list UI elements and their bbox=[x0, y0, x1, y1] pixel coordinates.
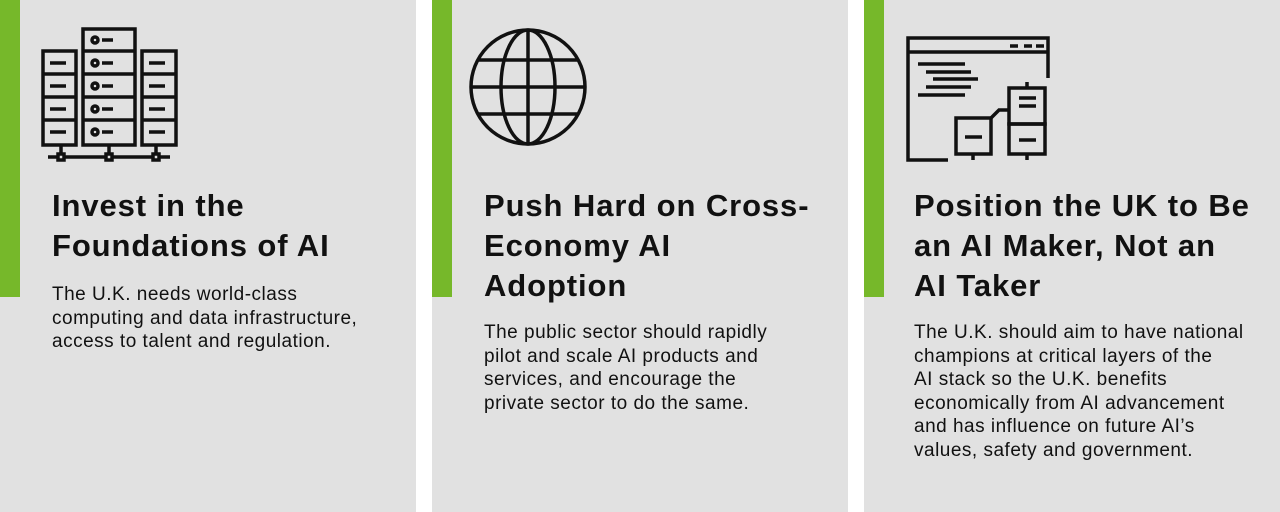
body text: The public sector should rapidly pilot and scale AI products and services, and encourage the private sector to do the same. bbox=[484, 322, 767, 414]
body text bbox=[914, 322, 1244, 460]
icon: window with flowchart bbox=[906, 36, 1050, 162]
heading bbox=[914, 188, 1250, 303]
heading: Adoption bbox=[484, 268, 627, 303]
body text: The U.K. should aim to have national bbox=[914, 322, 1244, 343]
body text: economically from AI advancement bbox=[914, 392, 1225, 414]
heading: Push Hard on Cross- bbox=[484, 188, 809, 223]
panel: foundations bbox=[0, 0, 416, 512]
heading bbox=[484, 188, 809, 303]
accent bar bbox=[432, 0, 452, 297]
heading: an AI Maker, Not an bbox=[914, 228, 1216, 263]
heading: Economy AI bbox=[484, 228, 671, 263]
panel: AI maker bbox=[864, 0, 1280, 512]
body text: AI stack so the U.K. benefits bbox=[914, 369, 1167, 390]
panel: adoption bbox=[432, 0, 848, 512]
icon: globe bbox=[469, 28, 587, 146]
body text: champions at critical layers of the bbox=[914, 346, 1212, 366]
body text: and has influence on future AI’s bbox=[914, 416, 1195, 437]
icon: servers bbox=[41, 27, 178, 162]
accent bar bbox=[864, 0, 884, 297]
body text: values, safety and government. bbox=[914, 440, 1193, 460]
heading bbox=[52, 188, 330, 263]
heading: Position the UK to Be bbox=[914, 188, 1250, 223]
heading: AI Taker bbox=[914, 268, 1041, 303]
body text: The U.K. needs world-class computing and data infrastructure, access to talent and regulation. bbox=[52, 284, 357, 352]
accent bar bbox=[0, 0, 20, 297]
heading: Foundations of AI bbox=[52, 228, 330, 263]
heading: Invest in the bbox=[52, 188, 245, 223]
